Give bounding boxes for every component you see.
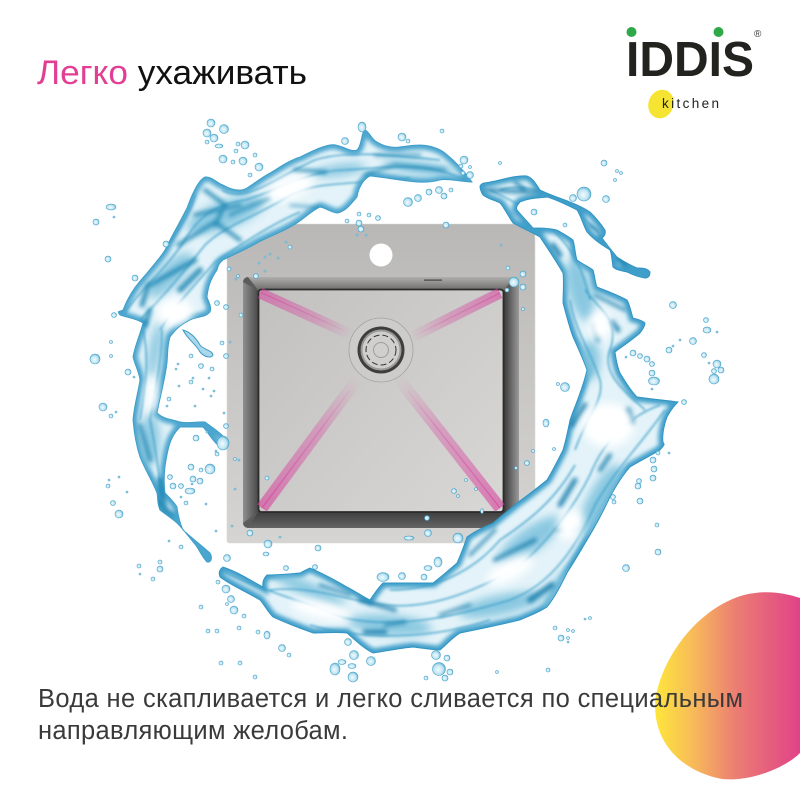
droplet cluster: upper left <box>93 119 366 281</box>
droplet cluster: on sink plate and around it <box>217 212 534 551</box>
logo: IDDIS kitchen: ® <box>754 29 762 40</box>
drain <box>349 318 413 382</box>
description text: Вода не скапливается и легко сливается по специальным <box>38 685 743 713</box>
sink <box>227 224 535 543</box>
droplet cluster: right <box>469 160 724 504</box>
logo: IDDIS kitchen: IDDIS <box>626 32 754 87</box>
description text: направляющим желобам. <box>38 717 348 745</box>
tap hole <box>370 244 392 266</box>
gradient blob <box>655 592 800 779</box>
logo: IDDIS kitchen <box>626 27 762 122</box>
droplet cluster: top centre <box>398 129 474 206</box>
title: Легко ухаживать <box>37 54 307 92</box>
basin floor <box>258 290 504 512</box>
droplet cluster: bottom <box>199 523 661 682</box>
droplet cluster: left <box>90 300 231 581</box>
water curl: left small branch <box>183 330 213 357</box>
logo: IDDIS kitchen: kitchen <box>662 96 719 111</box>
water: right and bottom arc <box>219 176 678 653</box>
basin walls <box>243 277 519 528</box>
water: left arc <box>118 130 472 562</box>
pink guide grooves <box>260 292 500 508</box>
